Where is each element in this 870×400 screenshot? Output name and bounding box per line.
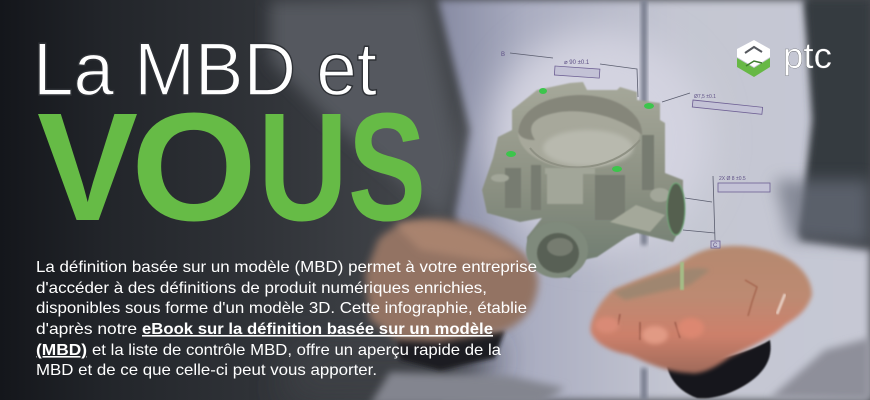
shirt [438, 0, 870, 400]
green markers [506, 88, 654, 172]
intro paragraph: eBook sur la définition basée sur un modèle [142, 321, 493, 338]
intro paragraph: La définition basée sur un modèle (MBD) permet à votre entreprise [36, 259, 537, 276]
right dark area [800, 0, 870, 243]
annotation labels: ⌀ 90 ±0.1 [564, 60, 590, 66]
intro paragraph: et la liste de contrôle MBD, offre un aperçu rapide de la [92, 342, 501, 359]
intro paragraph [36, 259, 537, 379]
intro paragraph: disponibles sous forme d'un modèle 3D. Cette infographie, établie [36, 300, 527, 317]
intro paragraph: d'après notre [36, 321, 137, 338]
annotation labels: B [501, 52, 505, 58]
right hand [591, 246, 812, 373]
annotation frames [554, 66, 770, 248]
annotation leader lines [510, 53, 715, 240]
right port [667, 183, 685, 235]
title line 2 [37, 81, 426, 253]
annotation labels: C [713, 243, 718, 249]
shirt: placket [641, 0, 647, 245]
logo wordmark: ptc [783, 35, 832, 76]
title line 2: S [348, 81, 426, 253]
title line 2: V [37, 81, 138, 253]
left cuff [398, 330, 505, 370]
shirt: bright glow behind model [490, 30, 710, 250]
housing body [482, 82, 683, 278]
logo: ptc [737, 35, 832, 77]
annotation labels: 2X Ø 8 ±0.5 [719, 176, 746, 182]
side walls and ribs [505, 135, 654, 220]
icon: ptc hexagon [737, 40, 770, 77]
3D model: cast housing [482, 52, 770, 278]
title [33, 27, 426, 253]
jacket lapel [270, 0, 460, 220]
intro paragraph: d'accéder à des définitions de produit numériques enrichies, [36, 280, 487, 297]
intro paragraph: (MBD) [36, 342, 87, 359]
title line 2: O [131, 81, 257, 253]
lower right sleeve [770, 338, 870, 400]
lower left sleeve [280, 340, 500, 400]
title line 2: U [258, 81, 348, 253]
lower port [526, 222, 588, 278]
left hand [365, 219, 538, 342]
bore opening [518, 95, 640, 169]
intro paragraph: MBD et de ce que celle-ci peut vous apporter. [36, 362, 377, 379]
title line 1: La MBD et [33, 27, 377, 111]
annotation labels: Ø7,5 ±0.1 [694, 94, 716, 100]
annotation labels [501, 52, 746, 249]
right cuff [667, 340, 771, 398]
